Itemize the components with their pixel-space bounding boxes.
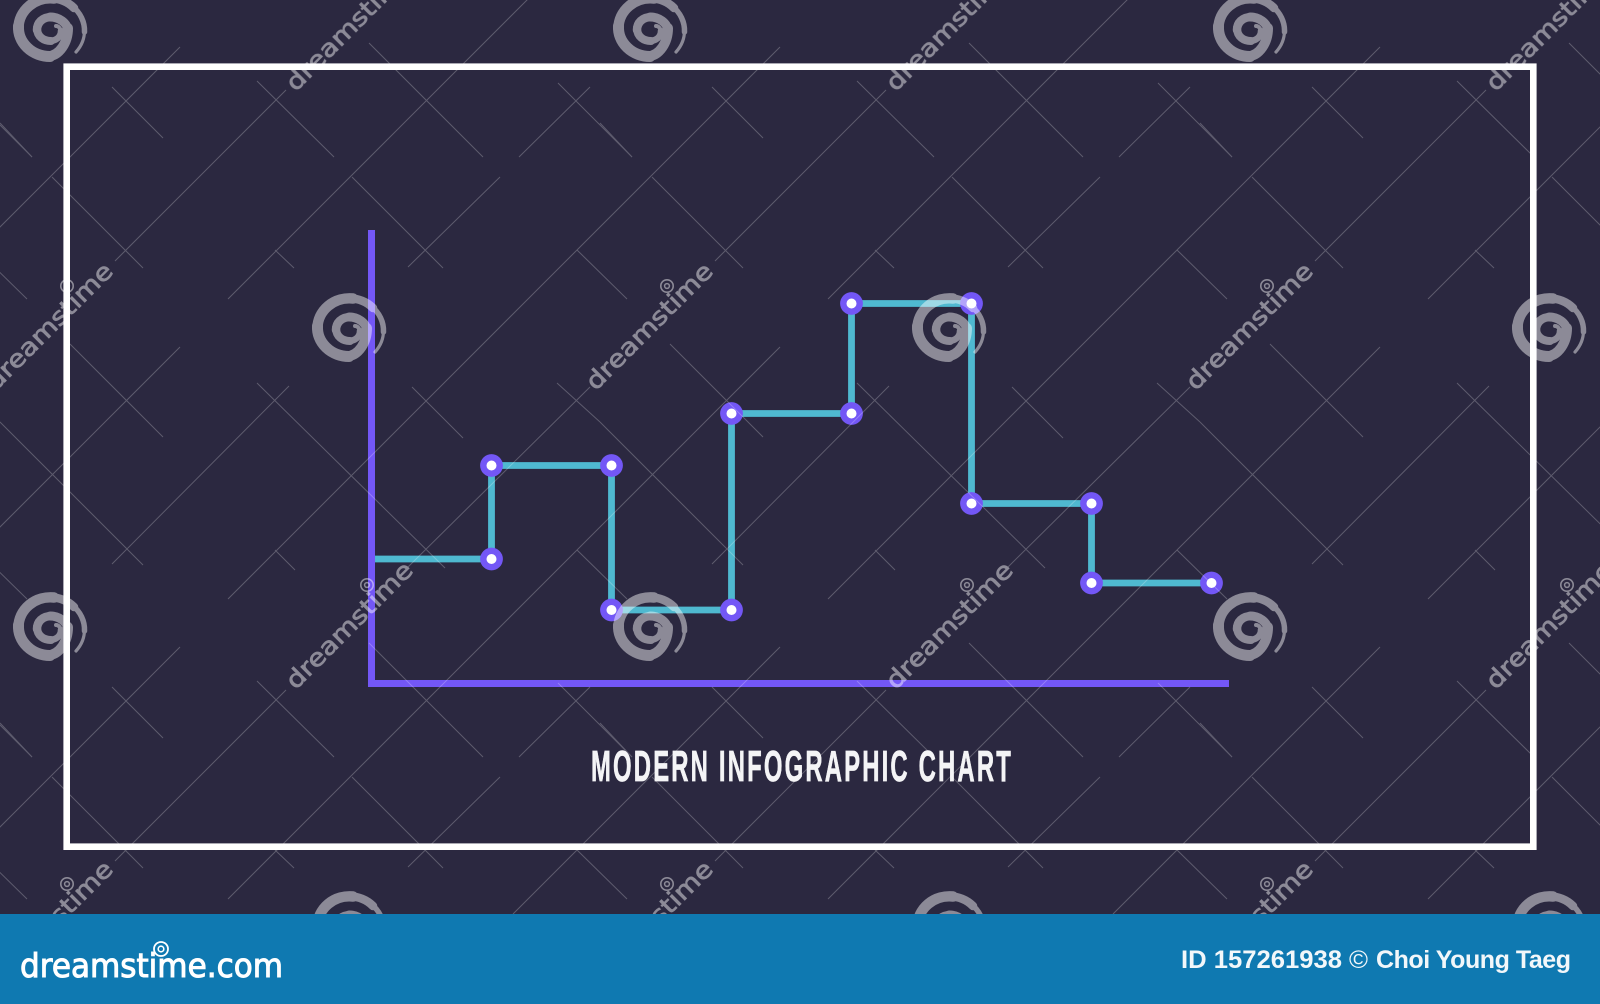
watermark text: dreamstime [1180,257,1319,396]
watermark text: dreamstime [880,556,1019,695]
watermark text: dreamstime [580,855,719,994]
step line series [375,304,1212,610]
image credit [1181,946,1571,974]
footer bar [0,914,1600,1004]
watermark text: dreamstime [1180,855,1319,994]
image credit: © [1349,946,1369,974]
image credit: ID 157261938 [1181,946,1342,974]
icon: logo spiral [154,942,168,956]
title: MODERN INFOGRAPHIC CHART [591,742,1013,791]
watermark text: dreamstime [580,257,719,396]
image credit: Choi Young Taeg [1376,946,1571,974]
watermark text: dreamstime [1480,556,1600,695]
watermark text: dreamstime [280,556,419,695]
chart [372,230,1229,684]
chart axes [372,230,1229,684]
data point markers [480,292,1223,621]
frame [67,67,1533,847]
footer logo: dreamstime.com [20,946,283,985]
